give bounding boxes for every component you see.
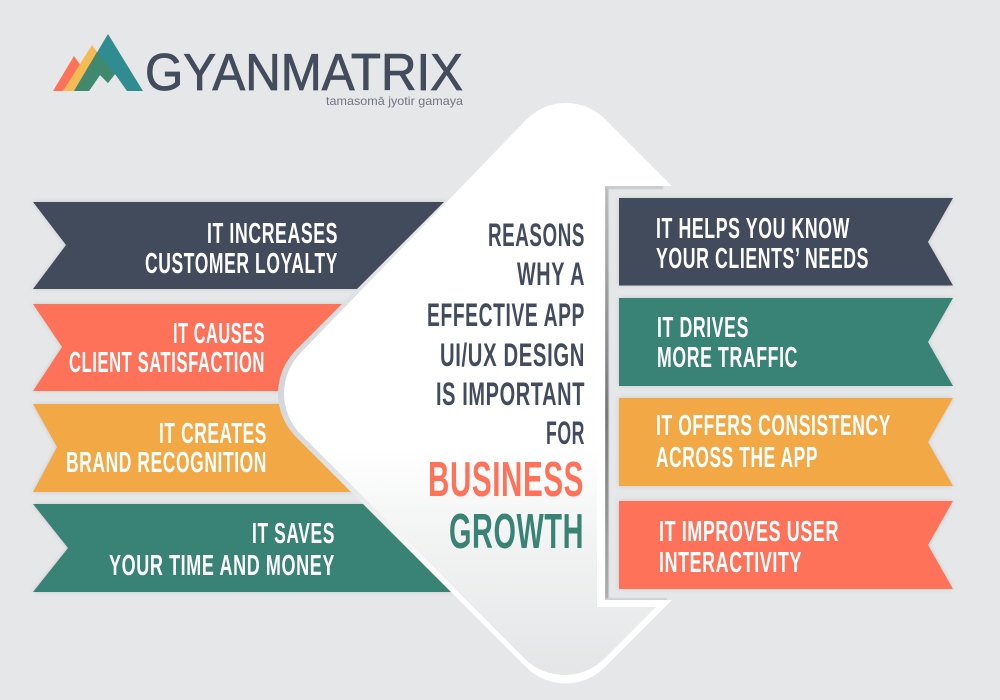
banner text (659, 516, 839, 579)
central double arrow panel (278, 103, 672, 684)
logo tagline: tamasomā jyotir gamaya (326, 94, 463, 108)
center heading: WHY A (517, 256, 585, 292)
banner text: BRAND RECOGNITION (66, 447, 267, 479)
banner text: IT IMPROVES USER (659, 516, 839, 548)
banner: it offers consistency across the app (619, 398, 953, 486)
banner: it causes client satisfaction (33, 304, 470, 391)
banner text: INTERACTIVITY (659, 547, 802, 579)
banner shape (619, 298, 953, 386)
banner: it increases customer loyalty (33, 202, 470, 289)
banner text (656, 213, 869, 275)
center heading: GROWTH (449, 505, 584, 559)
center heading (427, 217, 585, 559)
banner shape (33, 304, 470, 391)
banner text: IT INCREASES (207, 218, 338, 250)
banner text (145, 218, 338, 280)
banner text (69, 318, 265, 379)
center heading: BUSINESS (428, 453, 584, 507)
banner text: CLIENT SATISFACTION (69, 347, 265, 379)
banner text: YOUR CLIENTS’ NEEDS (656, 243, 869, 275)
banner shape (33, 202, 470, 289)
banner text: IT CAUSES (173, 318, 265, 350)
banner shape (33, 504, 470, 592)
logo (53, 34, 463, 108)
icon: mountain logo (53, 34, 143, 91)
banner text: IT DRIVES (657, 312, 749, 344)
banner: it saves your time and money (33, 504, 470, 592)
center heading: FOR (546, 415, 585, 451)
banner text: ACROSS THE APP (656, 442, 818, 474)
banner shape (33, 404, 470, 492)
banner: it creates brand recognition (33, 404, 470, 492)
banner: it drives more traffic (619, 298, 953, 386)
center heading: UI/UX DESIGN (440, 337, 585, 373)
logo wordmark: GYANMATRIX (145, 44, 463, 102)
center heading: IS IMPORTANT (436, 376, 585, 412)
banner text (66, 418, 267, 479)
banner text: MORE TRAFFIC (657, 342, 798, 374)
banner text: YOUR TIME AND MONEY (109, 550, 335, 582)
banner: it helps you know your clients' needs (619, 198, 953, 286)
banner shape (619, 398, 953, 486)
banner text: IT CREATES (159, 418, 267, 450)
banner text: CUSTOMER LOYALTY (145, 248, 338, 280)
banner text (109, 518, 335, 582)
center heading: REASONS (488, 217, 585, 253)
banner text (656, 410, 891, 474)
banner shape (619, 198, 953, 286)
banner text (657, 312, 798, 374)
banner shape (619, 501, 953, 589)
banner text: IT HELPS YOU KNOW (656, 213, 850, 245)
banner: it improves user interactivity (619, 501, 953, 589)
banner text: IT SAVES (252, 518, 335, 550)
center heading: EFFECTIVE APP (427, 297, 585, 333)
